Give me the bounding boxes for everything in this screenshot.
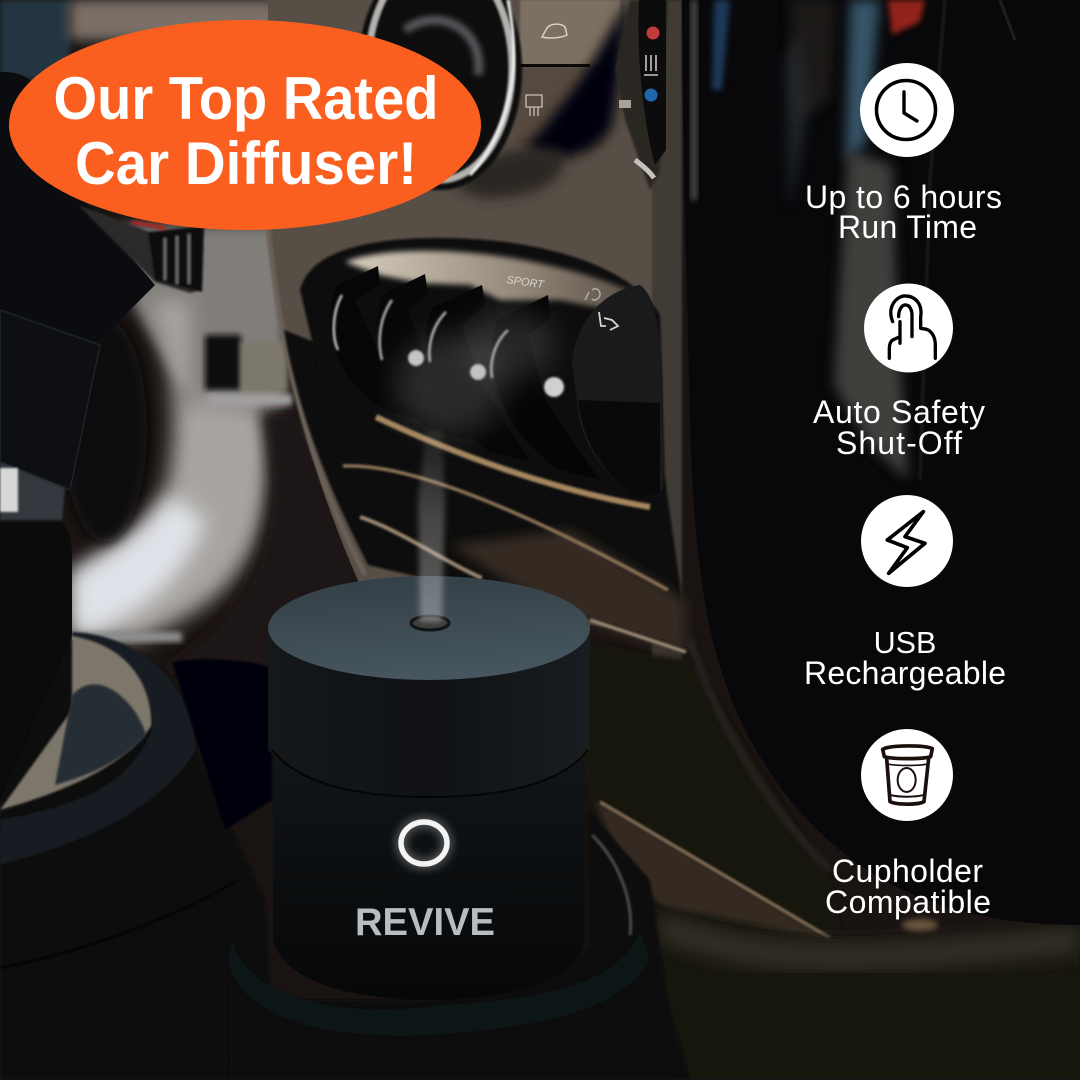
vent housing bbox=[300, 238, 665, 495]
diffuser upper cap bbox=[268, 628, 590, 797]
feature label bbox=[805, 179, 1002, 245]
light strip behind fins bbox=[345, 251, 640, 310]
control buttons bbox=[452, 0, 628, 198]
shift lever grille bbox=[78, 205, 204, 293]
diffuser cap seam bbox=[272, 750, 588, 797]
mist hole bbox=[411, 616, 449, 630]
badge: top rated bbox=[9, 20, 481, 230]
gear shifter bbox=[0, 72, 204, 830]
feature label: Compatible bbox=[825, 884, 991, 920]
feature label bbox=[825, 853, 991, 920]
badge heading bbox=[54, 65, 438, 197]
feature label: Run Time bbox=[838, 209, 977, 245]
feature label: Shut-Off bbox=[836, 425, 962, 461]
feature label: Up to 6 hours bbox=[805, 179, 1002, 215]
door and seat blur on the left bbox=[0, 0, 380, 670]
feature: run time bbox=[805, 63, 1002, 245]
diffuser top surface bbox=[268, 576, 590, 680]
glowing power ring bbox=[401, 822, 447, 864]
feature: USB rechargeable bbox=[804, 495, 1006, 691]
badge heading: Car Diffuser! bbox=[75, 130, 417, 197]
gear chrome bbox=[0, 462, 65, 520]
diffuser lower body bbox=[273, 760, 585, 1000]
brand name: REVIVE bbox=[355, 901, 495, 944]
glossy black right panel bbox=[682, 0, 1080, 925]
right cupholder bbox=[228, 810, 690, 1080]
feature label: Rechargeable bbox=[804, 655, 1006, 691]
chrome studs bbox=[408, 350, 564, 397]
lower right console bbox=[560, 640, 1080, 1080]
feature: cupholder compatible bbox=[825, 729, 991, 920]
rear defrost button bbox=[572, 285, 663, 497]
vent fins bbox=[330, 266, 600, 480]
mist plume bbox=[395, 310, 555, 622]
feature label bbox=[813, 394, 985, 461]
product: REVIVE diffuser bbox=[268, 576, 590, 1000]
icon: touch finger bbox=[864, 284, 953, 372]
feature label bbox=[804, 626, 1006, 691]
dash plate bbox=[268, 0, 680, 640]
round chrome vent bbox=[358, 0, 522, 190]
icon: clock bbox=[860, 63, 954, 157]
feature label: Auto Safety bbox=[813, 394, 985, 430]
feature: auto safety shut-off bbox=[813, 284, 985, 461]
feature label: USB bbox=[874, 626, 936, 660]
climate dial bbox=[615, 0, 668, 190]
feature label: Cupholder bbox=[832, 853, 983, 889]
icon: lightning bolt bbox=[861, 495, 953, 587]
left cupholder bbox=[0, 632, 275, 1080]
sport label: SPORT bbox=[506, 274, 546, 291]
badge heading: Our Top Rated bbox=[54, 65, 438, 132]
icon: cup bbox=[861, 729, 953, 821]
tan trim strips bbox=[343, 417, 686, 652]
dashboard console bbox=[268, 0, 690, 660]
gear boot leather bbox=[0, 522, 72, 830]
